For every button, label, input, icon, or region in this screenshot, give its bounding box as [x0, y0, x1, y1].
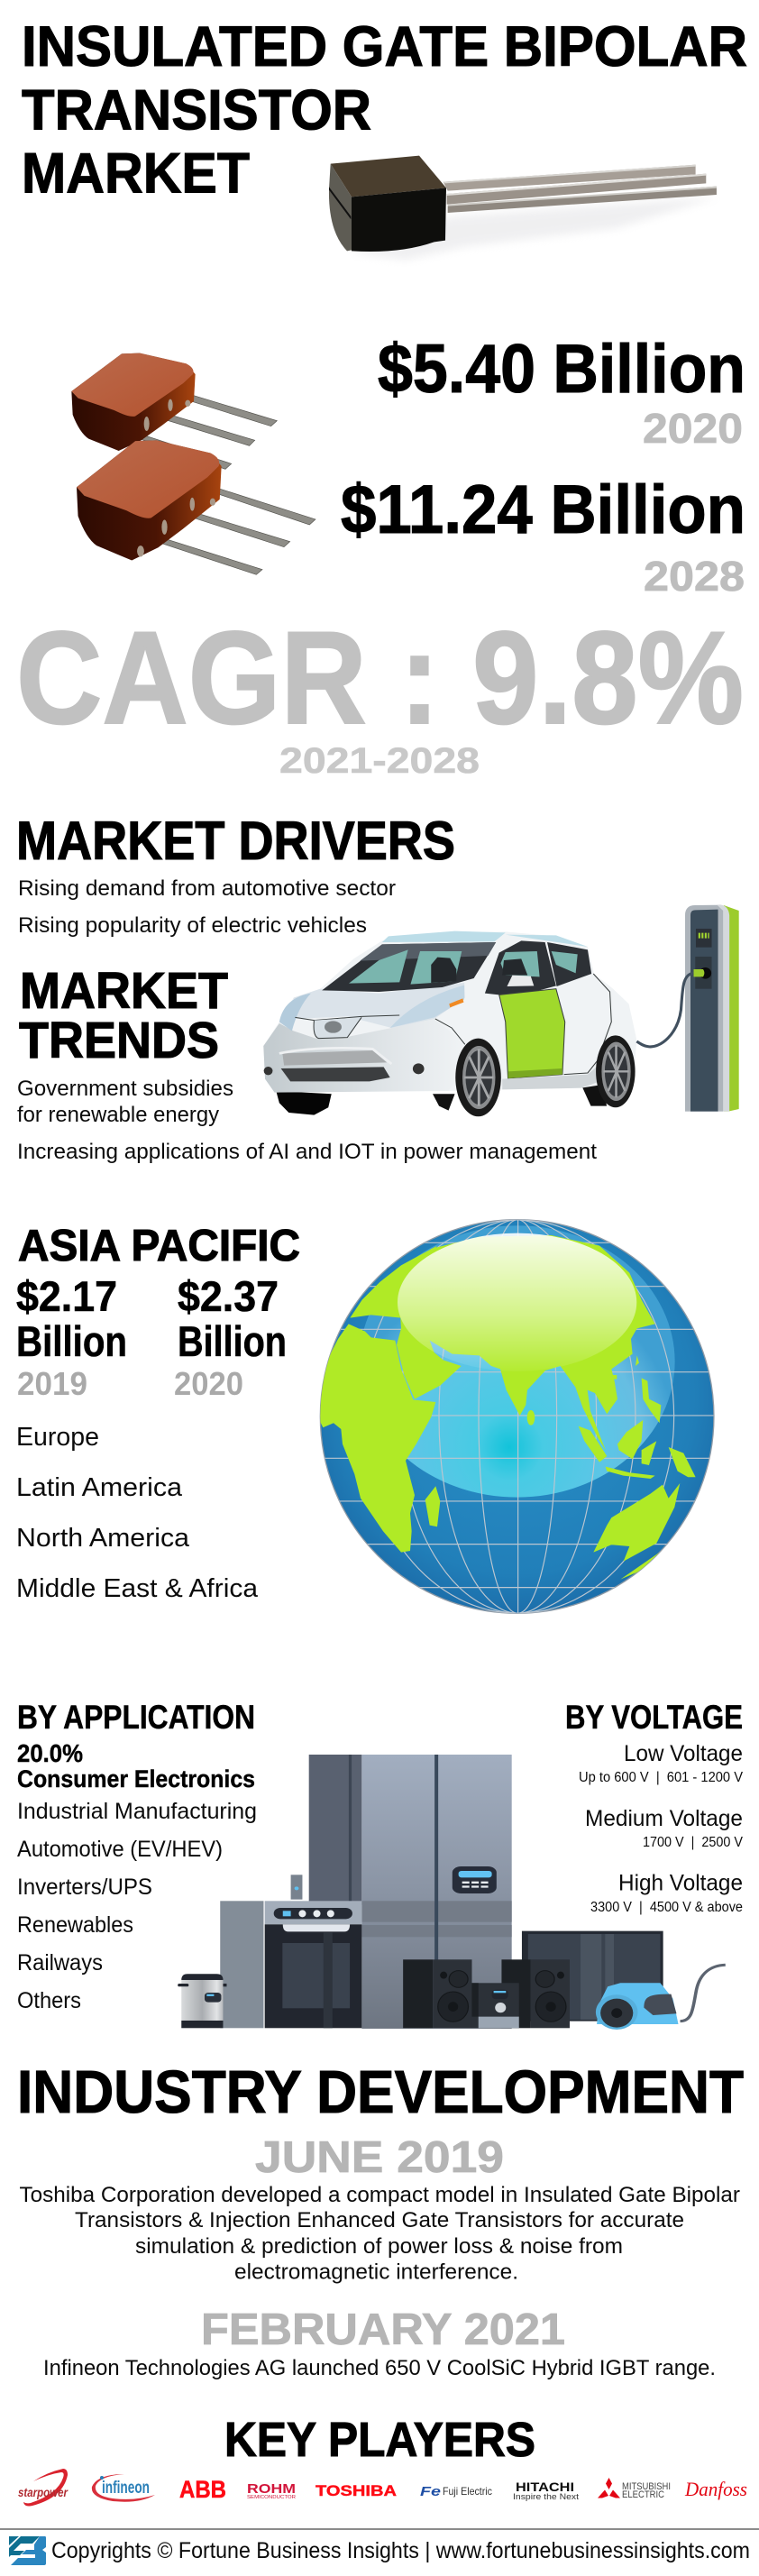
panel: market trends: Increasing applications of AI and IOT in power management	[17, 1140, 597, 1164]
panel: industry development	[17, 2058, 744, 2380]
logo: ROHM: ROHM	[247, 2481, 296, 2497]
logo: infineon	[92, 2474, 155, 2502]
lens highlight	[398, 1233, 636, 1371]
title: MARKET	[22, 142, 250, 206]
vacuum cleaner	[596, 1965, 726, 2030]
text: toshiba development: simulation & prediction of power loss & noise from	[135, 2234, 623, 2259]
logo: starpower: starpower	[18, 2485, 69, 2499]
logo: mitsubishi electric	[598, 2478, 671, 2500]
logo: fuji electric: Fe	[420, 2484, 441, 2499]
logo: mitsubishi electric: MITSUBISHI	[622, 2481, 671, 2492]
footer logo	[9, 2536, 46, 2565]
panel: asia pacific: ASIA PACIFIC	[18, 1222, 300, 1270]
oven and cabinet	[220, 1875, 361, 2028]
panel: market drivers: Rising popularity of electric vehicles	[18, 913, 367, 938]
footer rule	[0, 2528, 759, 2530]
legs of front chip	[156, 486, 315, 574]
panel: asia pacific: $2.37	[178, 1272, 279, 1320]
text: toshiba development: Transistors & Injection Enhanced Gate Transistors for accurate	[75, 2208, 684, 2232]
panel: company logos	[18, 2469, 747, 2507]
panel: by voltage: 1700 V | 2500 V	[643, 1835, 744, 1850]
grille	[264, 1048, 425, 1081]
logo: infineon: infineon	[102, 2479, 150, 2498]
text: toshiba development: Toshiba Corporation developed a compact model in Insulated Gate Bipolar	[20, 2183, 740, 2207]
panel: market drivers: MARKET DRIVERS	[16, 811, 455, 871]
date: february 2021: FEBRUARY 2021	[201, 2306, 565, 2354]
region list	[16, 1423, 259, 1603]
panel: asia pacific: Billion	[178, 1317, 287, 1365]
logo: toshiba: TOSHIBA	[315, 2482, 397, 2499]
logo: ABB: ABB	[179, 2476, 226, 2503]
text: infineon development: Infineon Technologies AG launched 650 V CoolSiC Hybrid IGBT range.	[43, 2356, 716, 2380]
logo: hitachi	[513, 2480, 580, 2501]
panel: by voltage	[565, 1699, 744, 1915]
panel: by application: Industrial Manufacturing	[17, 1799, 257, 1824]
panel: by voltage: Medium Voltage	[585, 1806, 743, 1831]
logo: ROHM: SEMICONDUCTOR	[247, 2495, 296, 2500]
image: electric car	[263, 931, 636, 1116]
panel: by voltage: 3300 V | 4500 V & above	[590, 1900, 743, 1915]
panel: by application: Inverters/UPS	[17, 1875, 152, 1900]
logo: fuji electric: Fuji Electric	[443, 2485, 492, 2498]
image: globe	[319, 1219, 714, 1614]
panel: by application	[17, 1699, 257, 2013]
logo: ROHM	[247, 2481, 296, 2500]
panel: market trends: Government subsidies	[17, 1077, 233, 1101]
panel: market drivers	[16, 811, 455, 938]
refrigerator	[309, 1755, 512, 2029]
logo: danfoss: Danfoss	[684, 2478, 747, 2500]
region list: Latin America	[16, 1473, 183, 1502]
panel: by application: Consumer Electronics	[17, 1765, 255, 1792]
CAGR: 2021-2028	[279, 741, 480, 781]
market size 2028: 2028	[644, 553, 745, 600]
market size 2020: 2020	[643, 405, 743, 452]
heading: key players: KEY PLAYERS	[224, 2413, 535, 2467]
title: TRANSISTOR	[22, 79, 371, 142]
logo: fuji electric	[420, 2484, 492, 2499]
image: home appliances	[178, 1755, 726, 2030]
market size 2028	[341, 472, 745, 600]
panel: by application: Automotive (EV/HEV)	[17, 1837, 223, 1862]
title	[22, 15, 747, 206]
rice cooker	[178, 1974, 226, 2028]
logo: hitachi: Inspire the Next	[513, 2492, 580, 2501]
panel: market drivers: Rising demand from automotive sector	[18, 876, 396, 901]
rear chip body	[71, 353, 196, 451]
panel: asia pacific: 2020	[174, 1365, 243, 1402]
panel: asia pacific: Billion	[16, 1317, 127, 1365]
legs of rear chip	[140, 394, 277, 469]
panel: by voltage: Low Voltage	[624, 1741, 743, 1766]
panel: asia pacific	[16, 1222, 300, 1402]
panel: market trends	[17, 962, 597, 1164]
logo: mitsubishi electric: ELECTRIC	[622, 2489, 664, 2500]
region list: Europe	[16, 1423, 99, 1452]
land: africa	[319, 1324, 435, 1553]
panel: asia pacific: 2019	[17, 1365, 87, 1402]
land: eurasia	[397, 1235, 655, 1450]
region list: North America	[16, 1524, 190, 1553]
panel: asia pacific: $2.17	[16, 1272, 117, 1320]
image: orange transistors	[71, 353, 315, 574]
image: black transistor	[329, 156, 718, 260]
land: europe and islands	[350, 1246, 696, 1580]
television	[522, 1931, 663, 2021]
text: toshiba development: electromagnetic interference.	[234, 2260, 518, 2285]
logo: starpower	[18, 2469, 69, 2507]
date: june 2019: JUNE 2019	[255, 2133, 504, 2182]
speakers and stereo	[403, 1959, 570, 2028]
wheels	[455, 1035, 636, 1116]
panel: by application: 20.0%	[17, 1739, 83, 1767]
panel: by voltage: Up to 600 V | 601 - 1200 V	[579, 1770, 744, 1785]
headlights	[279, 985, 464, 1039]
panel: by application: Renewables	[17, 1912, 133, 1938]
region list: Middle East & Africa	[16, 1574, 259, 1603]
panel: market trends: for renewable energy	[17, 1103, 219, 1127]
icon: charging station	[636, 904, 739, 1112]
front chip body	[77, 440, 222, 561]
panel: by application: BY APPLICATION	[17, 1699, 255, 1736]
panel: by voltage: High Voltage	[618, 1870, 743, 1895]
panel: by application: Railways	[17, 1950, 103, 1976]
logo: hitachi: HITACHI	[516, 2480, 574, 2494]
panel: market trends: MARKET	[20, 962, 228, 1020]
panel: by application: Others	[17, 1988, 81, 2013]
panel: market trends: TRENDS	[19, 1012, 219, 1069]
market size 2020	[378, 331, 745, 452]
text: toshiba development	[20, 2183, 740, 2285]
